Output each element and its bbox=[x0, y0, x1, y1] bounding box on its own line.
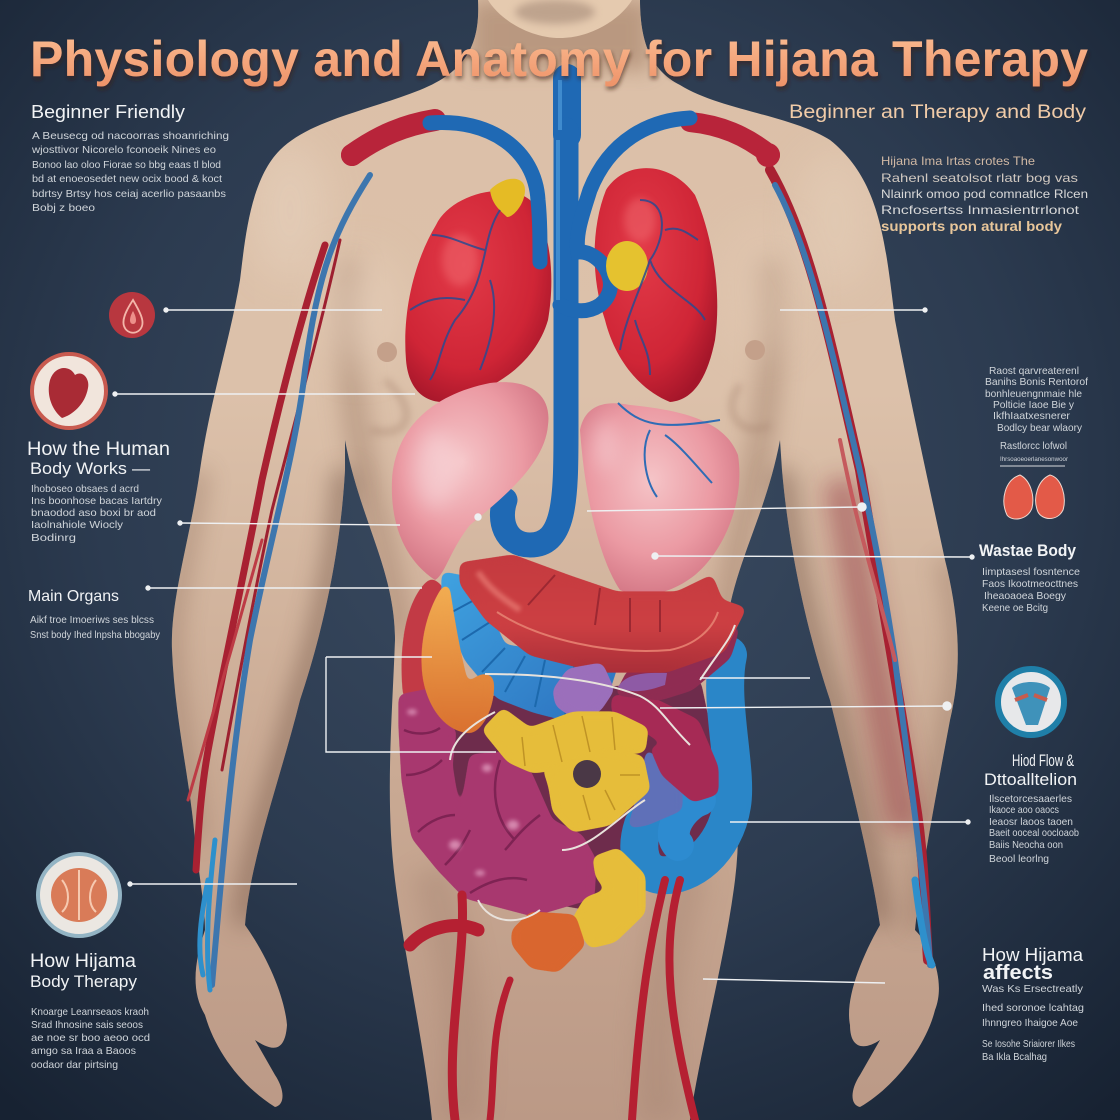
left block: beginner friendly: bd at enoeosedet new ocix bood & koct bbox=[32, 173, 222, 185]
red stomach bbox=[460, 555, 746, 672]
left block: how hijama body therapy: Body Therapy bbox=[30, 973, 138, 991]
yellow ring bbox=[543, 748, 650, 832]
left block: how the human body works: bnaodod aso boxi br aod bbox=[31, 507, 156, 519]
nipples bbox=[377, 342, 397, 362]
left block: how the human body works: Ihoboseo obsaes d acrd bbox=[31, 483, 139, 495]
colon segments bbox=[452, 598, 575, 715]
right block: blood flow: Ikaoce aoo oaocs bbox=[989, 804, 1059, 816]
right block: how hijama affects: Se Iosohe Sriaiorer Ilkes bbox=[982, 1038, 1075, 1050]
left block: beginner friendly: wjosttivor Nicorelo fconoeik Nines eo bbox=[31, 144, 216, 156]
left block: how the human body works: Iaolnahiole Wiocly bbox=[31, 519, 124, 531]
right block: body text: Ihrsoaoeoerlanesonwoor bbox=[1000, 457, 1068, 463]
red lobe right bbox=[595, 168, 717, 402]
central blue vessels bbox=[430, 78, 690, 545]
left block: main organs: Main Organs bbox=[28, 588, 119, 605]
right block: blood flow: Ilscetorcesaaerles bbox=[989, 793, 1072, 805]
left block: how the human body works: Body Works — bbox=[30, 460, 151, 478]
right block: body text: bonhleuengnmaie hle bbox=[985, 388, 1082, 400]
icon: organ cross-section bbox=[38, 854, 120, 936]
right block: how hijama affects: Was Ks Ersectreatly bbox=[982, 983, 1084, 995]
left block: beginner friendly bbox=[31, 101, 229, 214]
icon: heart bbox=[32, 354, 106, 428]
lobe veins bbox=[410, 200, 705, 380]
orange tube bbox=[422, 584, 494, 733]
human body figure bbox=[172, 0, 958, 1120]
stomach folds bbox=[478, 572, 718, 651]
left block: main organs: Aikf troe Imoeriws ses blcss bbox=[30, 614, 154, 626]
right block: body text bbox=[985, 365, 1088, 463]
left block: beginner friendly: A Beusecg od nacoorras shoanriching bbox=[32, 130, 229, 142]
dark backing bbox=[435, 680, 725, 910]
pelvic arteries bbox=[410, 880, 695, 1120]
left red tube bbox=[402, 578, 444, 701]
icon: red ovals bbox=[1000, 466, 1065, 519]
left block: how the human body works: Bodinrg bbox=[31, 532, 76, 544]
magenta mass bbox=[399, 688, 596, 916]
violet segment bbox=[628, 748, 682, 828]
right block: hijana intro: Nlainrk omoo pod comnatlce Rlcen bbox=[881, 187, 1088, 201]
left block: how hijama body therapy bbox=[30, 951, 150, 1071]
right block: blood flow: Baiis Neocha oon bbox=[989, 839, 1063, 851]
red lobe left bbox=[405, 191, 551, 402]
yellow segments bbox=[522, 716, 640, 820]
left block: beginner friendly: bdrtsy Brtsy hos ceiaj acerlio pasaanbs bbox=[32, 188, 226, 200]
left block: how the human body works: How the Human bbox=[27, 438, 170, 460]
liver highlights bbox=[413, 419, 617, 510]
right block: hijana intro: Rahenl seatolsot rlatr bog vas bbox=[881, 171, 1078, 185]
right block: how hijama affects bbox=[982, 945, 1084, 1063]
blue right coil bbox=[639, 655, 733, 875]
vessel highlight bbox=[558, 80, 560, 300]
right block: body text: Rastlorcc lofwol bbox=[1000, 440, 1067, 452]
left block: beginner friendly: Bobj z boeo bbox=[32, 202, 95, 214]
right heading: Beginner an Therapy and Body bbox=[789, 102, 1087, 123]
right block: blood flow bbox=[984, 751, 1079, 865]
right liver veins bbox=[618, 403, 720, 497]
right block: waste body: Faos Ikootmeocttnes bbox=[982, 578, 1078, 590]
right block: hijana intro: Hijana Ima Irtas crotes The bbox=[881, 154, 1035, 168]
title: Physiology and Anatomy for Hijana Therapy bbox=[30, 31, 1088, 87]
arm arteries and veins bbox=[188, 170, 932, 990]
plum band bbox=[615, 615, 744, 700]
yellow top bbox=[482, 708, 648, 773]
liver right bbox=[580, 403, 739, 595]
right block: body text: Bodlcy bear wlaory bbox=[997, 422, 1083, 434]
intestines bbox=[399, 555, 746, 972]
right block: body text: Raost qarvreaterenl bbox=[989, 365, 1079, 377]
right block: hijana intro bbox=[881, 154, 1088, 234]
right block: waste body: Keene oe Bcitg bbox=[982, 602, 1048, 614]
right block: how hijama affects: Ihed soronoe lcahtag bbox=[982, 1002, 1084, 1014]
icon: blue circle organ bbox=[998, 669, 1064, 735]
right block: body text: Banihs Bonis Rentorof bbox=[985, 376, 1088, 388]
right block: waste body bbox=[979, 541, 1080, 614]
right block: how hijama affects: Ba Ikla Bcalhag bbox=[982, 1051, 1047, 1063]
left block: how hijama body therapy: amgo sa Iraa a Baoos bbox=[31, 1045, 136, 1057]
right block: how hijama affects: Ihnngreo Ihaigoe Aoe bbox=[982, 1017, 1078, 1029]
crimson band bbox=[612, 695, 718, 802]
right block: waste body: Wastae Body bbox=[979, 541, 1076, 560]
lobe highlights bbox=[442, 198, 656, 286]
left block: how hijama body therapy: Srad Ihnosine sais seoos bbox=[31, 1019, 143, 1031]
yellow glands bbox=[490, 179, 648, 291]
blue colon bbox=[442, 572, 618, 722]
liver left bbox=[392, 382, 548, 580]
right block: hijana intro: Rncfosertss Inmasientrrlonot bbox=[881, 203, 1080, 217]
yellow lower bbox=[572, 848, 645, 948]
right block: hijana intro: supports pon atural body bbox=[881, 218, 1062, 234]
right block: body text: Polticie Iaoe Bie y bbox=[993, 399, 1075, 411]
left block: how hijama body therapy: Knoarge Leanrseaos kraoh bbox=[31, 1006, 149, 1018]
orange appendix bbox=[512, 912, 585, 972]
left block: how hijama body therapy: How Hijama bbox=[30, 951, 136, 972]
right block: blood flow: Dttoalltelion bbox=[984, 771, 1077, 789]
right block: blood flow: Ieaosr laoos taoen bbox=[989, 816, 1073, 828]
right block: waste body: Iheaoaoea Boegy bbox=[984, 590, 1067, 602]
white fine vessels bbox=[450, 625, 735, 920]
icon: blood drop bbox=[109, 292, 155, 338]
purple pouch bbox=[553, 663, 614, 720]
left block: beginner friendly: Beginner Friendly bbox=[31, 101, 186, 122]
right block: how hijama affects: affects bbox=[983, 962, 1053, 984]
right block: blood flow: Hiod Flow & bbox=[1012, 751, 1074, 770]
right block: how hijama affects: How Hijama bbox=[982, 945, 1084, 965]
left block: how the human body works: Ins boonhose bacas Iartdry bbox=[31, 495, 163, 507]
right block: blood flow: Baeit ooceal oocloaob bbox=[989, 827, 1079, 839]
right block: blood flow: Beool leorlng bbox=[989, 853, 1049, 865]
left block: main organs: Snst body Ihed lnpsha bbogaby bbox=[30, 629, 161, 641]
shoulder arteries bbox=[341, 120, 780, 167]
magenta lobe detail bbox=[404, 728, 540, 893]
leader lines bbox=[113, 308, 974, 983]
left block: how the human body works bbox=[27, 438, 170, 544]
right block: body text: IkfhIaatxesnerer bbox=[993, 410, 1071, 422]
left block: beginner friendly: Bonoo lao oloo Fiorae so bbg eaas tl blod bbox=[32, 159, 221, 171]
right block: waste body: Iimptasesl fosntence bbox=[982, 566, 1080, 578]
left block: how hijama body therapy: ae noe sr boo aeoo ocd bbox=[31, 1032, 150, 1044]
chin bbox=[488, 0, 632, 38]
left block: main organs bbox=[28, 588, 161, 641]
left block: how hijama body therapy: oodaor dar pirtsing bbox=[31, 1059, 118, 1071]
